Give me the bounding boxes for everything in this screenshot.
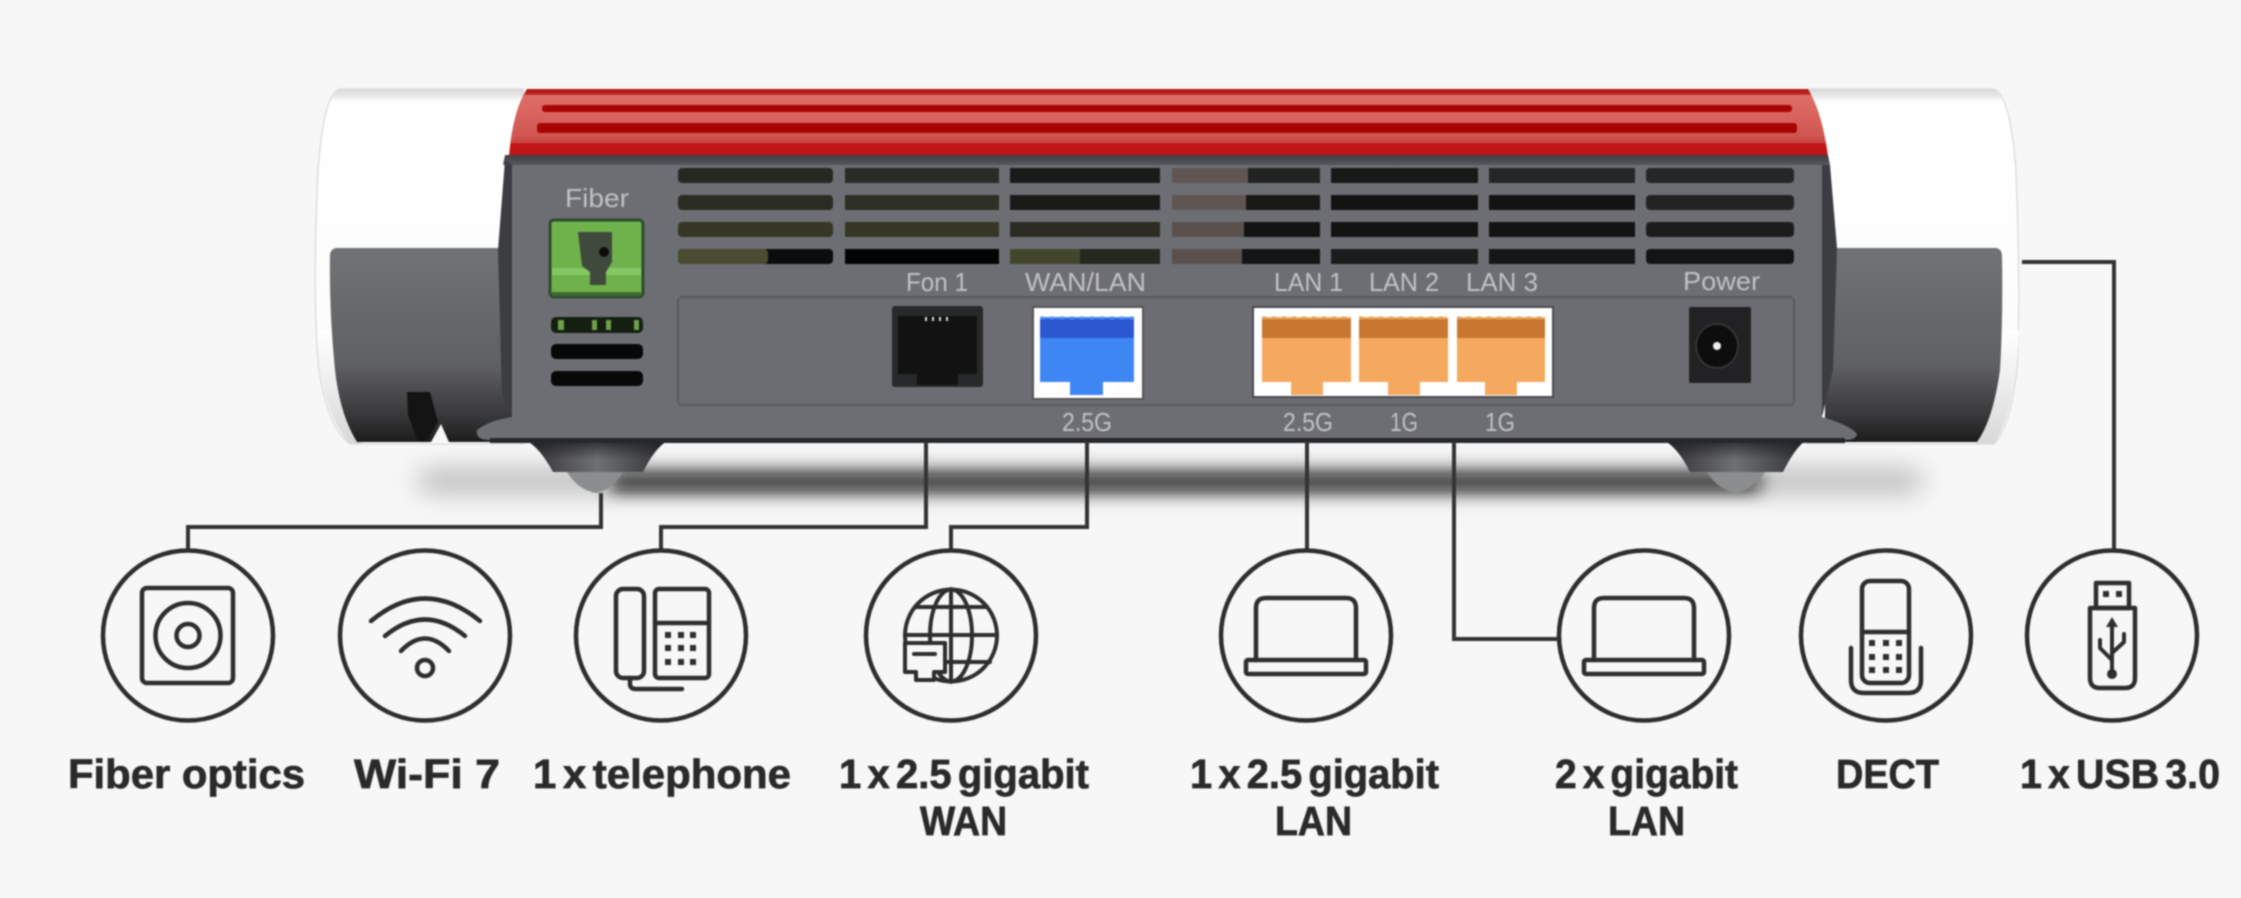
body right shade — [1822, 165, 1837, 417]
labels: LAN speeds — [1283, 407, 1515, 437]
labels: LAN 1 to 3: LAN 3 — [1466, 267, 1538, 297]
label: 1 x telephone: 1 x telephone — [533, 751, 791, 797]
feet — [527, 441, 1805, 493]
label: Fon 1: Fon 1 — [906, 267, 968, 297]
ventilation slots — [678, 168, 1794, 264]
label: 1 x 2.5 gigabit LAN: 1 x 2.5 gigabit — [1190, 751, 1439, 797]
power port — [1689, 307, 1751, 383]
labels: LAN speeds: 1G — [1485, 407, 1515, 437]
body top rim — [503, 155, 1830, 165]
icon: USB stick — [2027, 550, 2197, 720]
icon: telephone — [576, 550, 746, 720]
label: 1 x 2.5 gigabit WAN: 1 x 2.5 gigabit — [839, 751, 1089, 797]
LAN ports — [1253, 307, 1553, 397]
WAN port — [1033, 307, 1143, 399]
labels: LAN 1 to 3: LAN 1 — [1274, 267, 1343, 297]
router — [315, 89, 2019, 493]
right grey side block — [1825, 248, 2002, 442]
label: 1 x 2.5 gigabit LAN — [1190, 751, 1439, 844]
red cover grooves — [537, 105, 1797, 133]
labels: LAN 1 to 3 — [1274, 267, 1538, 297]
label: Fiber: Fiber — [565, 183, 629, 213]
labels: LAN 1 to 3: LAN 2 — [1369, 267, 1439, 297]
icon: Wi-Fi — [340, 550, 510, 720]
fiber port — [550, 220, 643, 297]
labels: LAN speeds: 2.5G — [1283, 407, 1333, 437]
router rear body — [477, 160, 1857, 440]
connector lines — [188, 262, 2114, 639]
right cap lower edge — [1975, 330, 2019, 444]
fiber side slots — [551, 317, 643, 386]
right white end cap — [1808, 89, 2019, 444]
body left shade — [498, 160, 512, 417]
label: DECT: DECT — [1836, 751, 1939, 797]
icon: DECT handset — [1801, 550, 1971, 720]
label: 2.5G WAN: 2.5G — [1062, 407, 1112, 437]
red top cover — [509, 89, 1828, 156]
left grey side block — [330, 248, 512, 442]
label: 1 x 2.5 gigabit WAN — [839, 751, 1089, 844]
left cable notch — [407, 392, 438, 442]
icon: laptop 2.5 gigabit — [1221, 550, 1391, 720]
router shadow — [420, 474, 1920, 490]
label: 2 x gigabit LAN: 2 x gigabit — [1555, 751, 1738, 797]
label: 2 x gigabit LAN — [1555, 751, 1738, 844]
label: 2 x gigabit LAN: LAN — [1608, 798, 1685, 844]
label: Fiber optics: Fiber optics — [68, 751, 305, 797]
icon: laptop gigabit — [1559, 550, 1729, 720]
icon: globe with network jack — [866, 550, 1036, 720]
label: Wi-Fi 7: Wi-Fi 7 — [354, 751, 500, 797]
recessed connector panel — [678, 297, 1794, 405]
label: 1 x 2.5 gigabit WAN: WAN — [920, 798, 1007, 844]
label: Power: Power — [1683, 266, 1760, 296]
left white end cap — [315, 89, 523, 444]
labels: LAN speeds: 1G — [1390, 407, 1418, 437]
icon: fiber optics — [103, 550, 273, 720]
label: 1 x 2.5 gigabit LAN: LAN — [1275, 798, 1352, 844]
left notch gap — [431, 424, 449, 442]
body bottom edge — [490, 438, 1845, 443]
left cap lower edge — [317, 330, 362, 444]
telephone port — [892, 306, 983, 387]
label: WAN/LAN: WAN/LAN — [1025, 267, 1146, 297]
label: 1 x USB 3.0: 1 x USB 3.0 — [2020, 751, 2220, 797]
